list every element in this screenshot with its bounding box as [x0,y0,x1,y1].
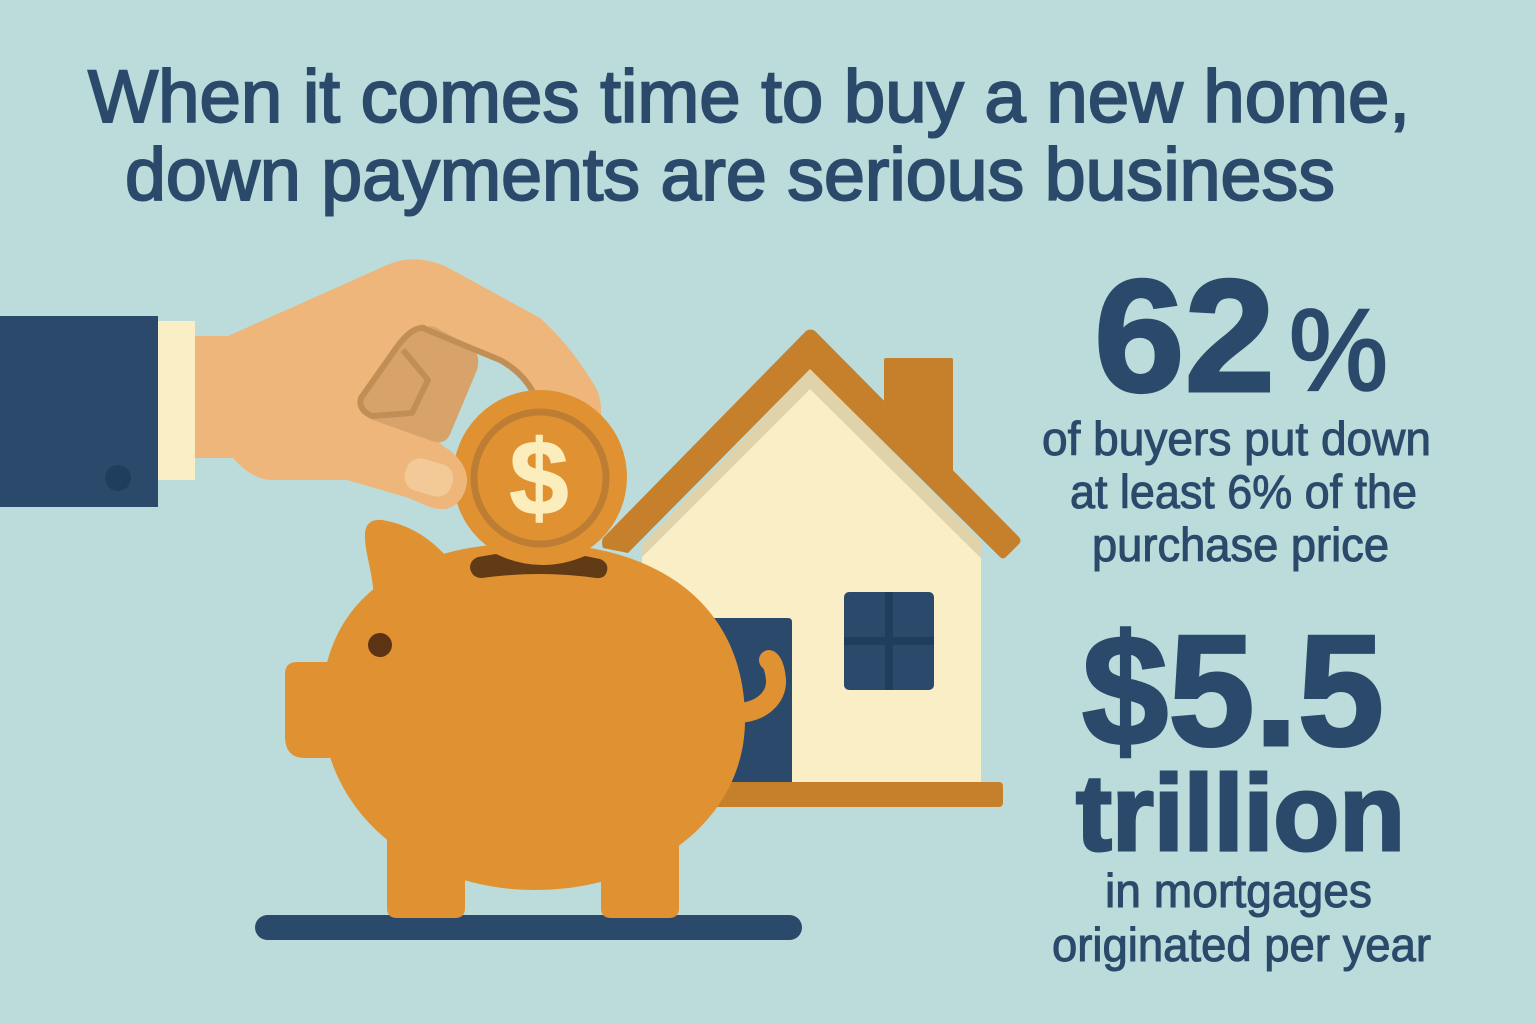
title: down payments are serious business [125,133,1335,216]
icon: coin [453,390,627,564]
house base [690,782,1003,807]
door [690,618,792,782]
coin slot [470,554,607,578]
roof underside shadow [642,369,981,558]
icon: piggy bank [285,520,776,918]
ground line [255,915,802,940]
palm fold finger [358,326,478,442]
house wall [642,389,981,782]
pig snout [285,662,345,758]
stat caption [1042,412,1431,571]
stat caption: at least 6% of the [1070,465,1417,518]
finger crease [360,327,533,416]
stat caption: of buyers put down [1042,412,1431,465]
pig body [322,543,745,890]
pig legs [387,830,465,918]
stat number 62: 62 [1094,246,1275,425]
pig tail [735,660,776,713]
stat caption: in mortgages [1105,864,1372,917]
shirt cuff [158,321,195,480]
pig ear [365,520,446,610]
chimney [884,358,953,490]
percent sign: % [1289,285,1388,415]
stat caption: purchase price [1092,518,1389,571]
hand [195,259,601,458]
icon: hand and cuff [0,259,601,509]
stat caption [1052,864,1431,971]
sleeve button [105,465,131,491]
stat: 62% [1042,246,1431,571]
roof [602,330,1020,558]
stat unit trillion: trillion [1076,752,1405,873]
stat: $5.5 trillion [1052,603,1431,971]
pig eye [368,633,392,657]
title [88,55,1410,216]
thumb [390,442,467,509]
window [844,592,934,690]
stat caption: originated per year [1052,918,1431,971]
title: When it comes time to buy a new home, [88,55,1410,138]
icon: coin: $ [510,419,568,537]
thumb nail [401,455,456,500]
icon: house [602,330,1020,807]
stat number $5.5: $5.5 [1082,603,1384,779]
sleeve [0,316,158,507]
